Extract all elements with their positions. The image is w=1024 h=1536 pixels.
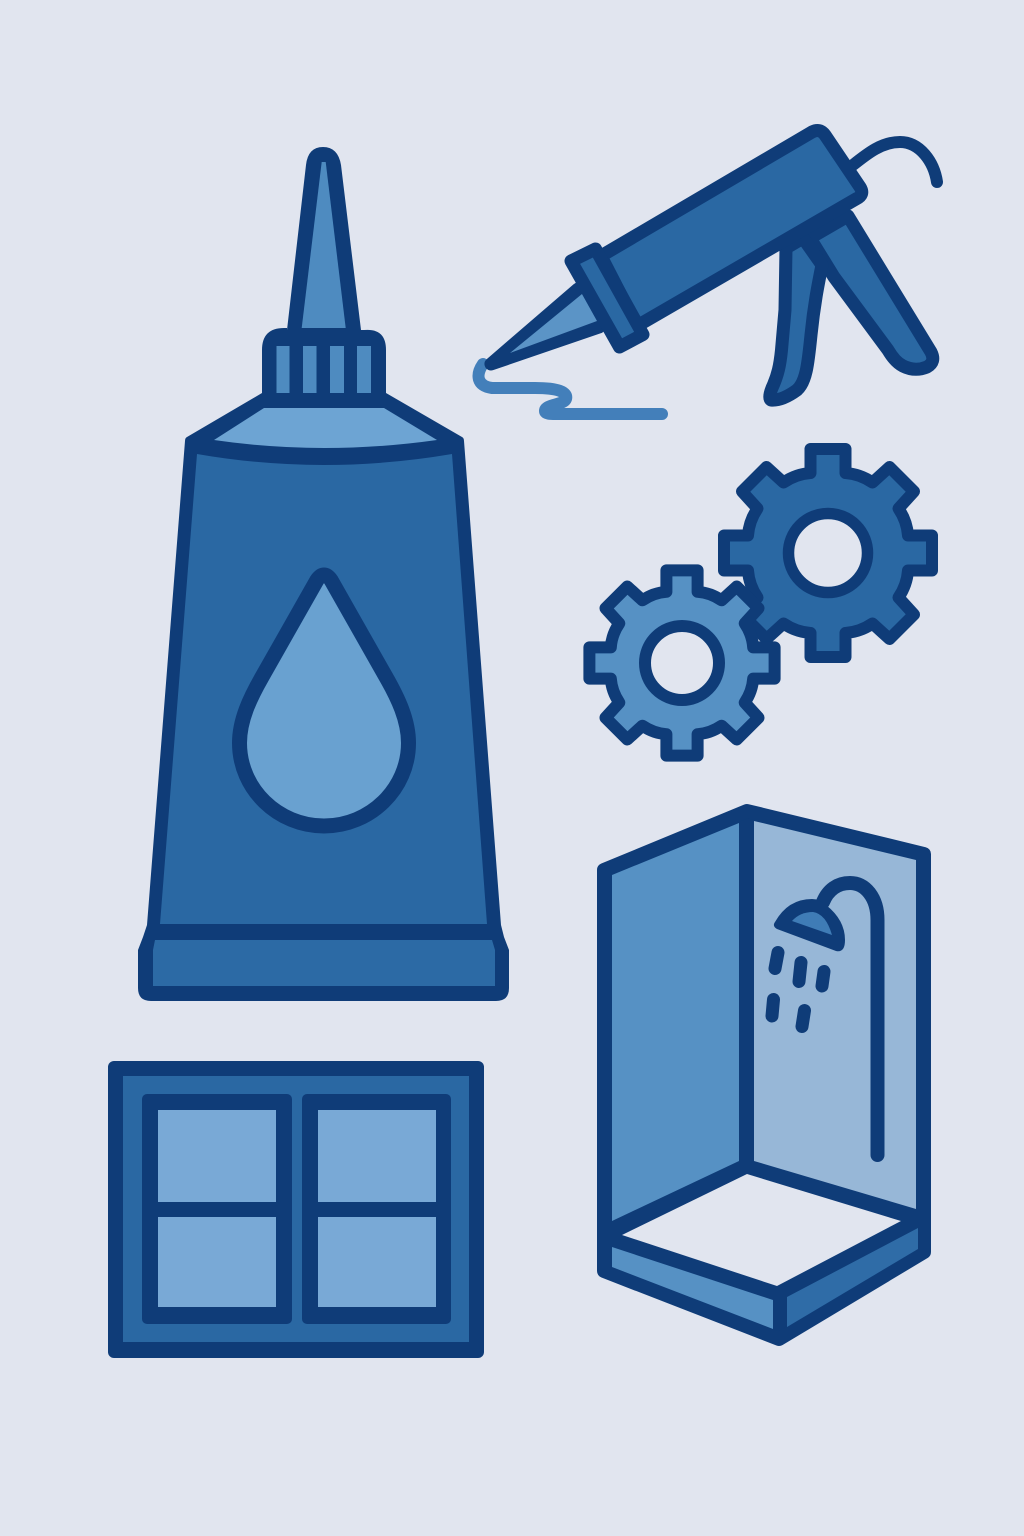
barrel collar (571, 249, 643, 347)
icon: shower cabin (604, 811, 924, 1339)
icon: water drop (240, 575, 408, 826)
window outer frame (108, 1061, 484, 1358)
tube nozzle (302, 162, 346, 328)
small gear hub (645, 626, 719, 700)
icon: caulking gun (479, 131, 937, 414)
sealant bead (479, 364, 662, 414)
icon: adhesive tube (138, 147, 509, 1001)
icon: window (108, 1061, 484, 1358)
window inner surround (123, 1076, 469, 1342)
icon: small gear (589, 570, 775, 756)
cartridge nozzle (491, 289, 599, 364)
front left strip (612, 1247, 773, 1329)
shower pipe (823, 883, 878, 1155)
shower floor (622, 1174, 901, 1286)
trigger (770, 238, 822, 400)
left wall (612, 823, 739, 1221)
water drops (772, 952, 824, 1026)
plunger rod (853, 142, 937, 182)
tube shoulder (214, 408, 437, 448)
icon: large gear (724, 449, 932, 657)
cartridge barrel (601, 131, 862, 326)
rear handle (810, 216, 933, 369)
front right strip (787, 1228, 918, 1327)
right sash (302, 1094, 451, 1324)
tube base (153, 940, 495, 986)
tube body (160, 454, 487, 924)
shower silhouette (604, 811, 924, 1339)
large gear hub (788, 514, 868, 592)
right wall (754, 821, 916, 1209)
left sash (142, 1094, 292, 1324)
tube cap ribs (276, 346, 371, 393)
tube silhouette (138, 147, 509, 1001)
shower head (774, 899, 845, 951)
